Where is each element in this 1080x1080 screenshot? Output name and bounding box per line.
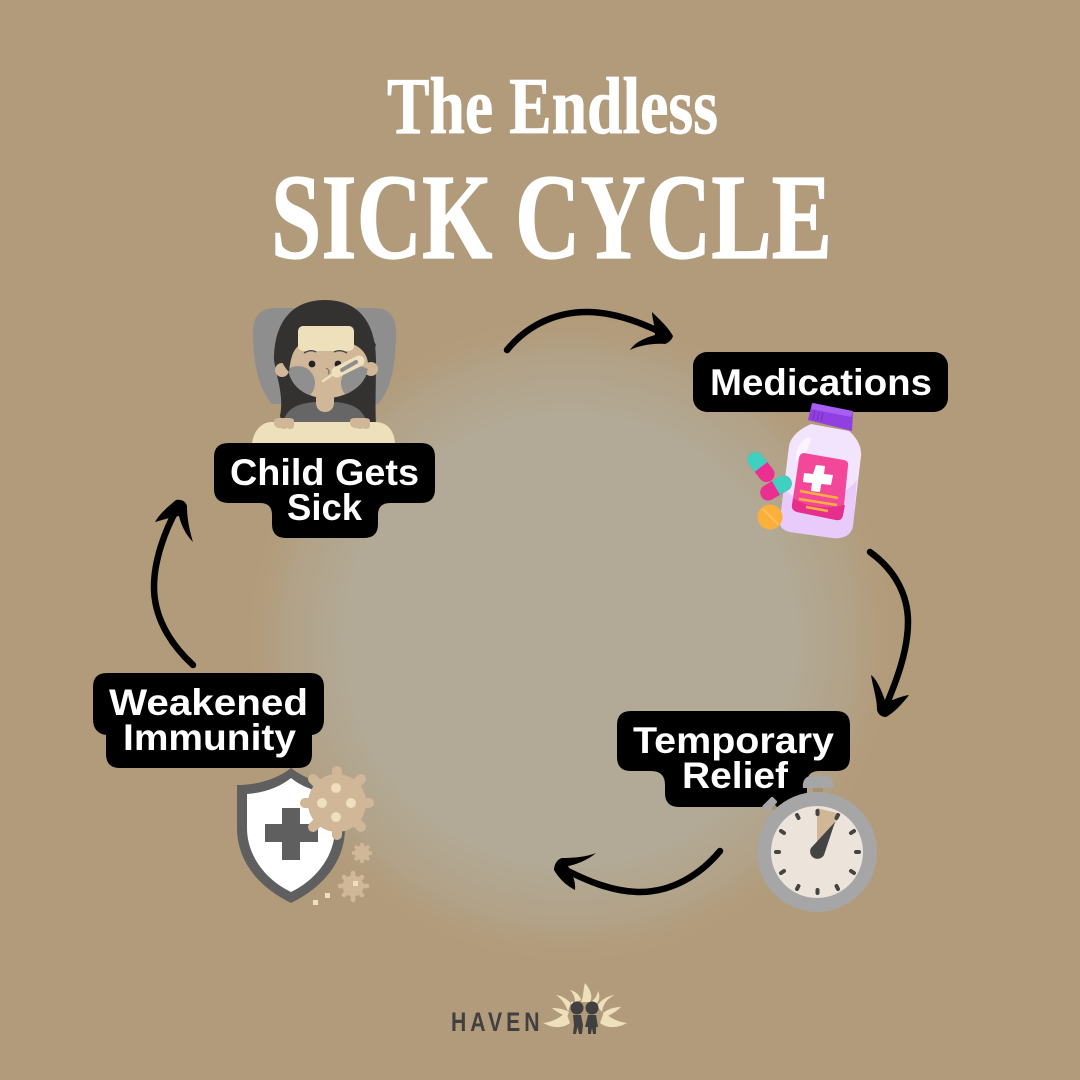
shirt <box>283 402 367 424</box>
label text line 1: Temporary <box>633 720 834 761</box>
background glow <box>240 310 900 970</box>
dots <box>313 893 330 905</box>
cap ridges <box>813 411 823 421</box>
ticks <box>776 811 859 893</box>
arrow: medications to relief <box>870 552 909 717</box>
crown stem <box>813 786 823 796</box>
pill teal and pink 1 <box>744 449 778 485</box>
hands <box>274 418 370 429</box>
outer case <box>757 792 877 912</box>
pill teal and pink 2 <box>757 473 795 503</box>
pillow <box>253 308 396 404</box>
fringe left <box>278 333 303 372</box>
shield cross <box>265 808 318 860</box>
cap <box>808 403 853 431</box>
crown button <box>803 776 833 788</box>
cap top highlight <box>811 403 853 417</box>
cross <box>803 465 833 492</box>
label text line 1: Child Gets <box>230 452 419 493</box>
virus small <box>352 843 372 863</box>
label background <box>617 711 850 807</box>
label background <box>693 352 948 412</box>
thermometer <box>323 361 359 381</box>
label background <box>214 443 435 538</box>
nose <box>326 368 329 374</box>
clock hand <box>810 822 835 859</box>
ear right <box>364 362 378 376</box>
title line: SICK CYCLE: SICK CYCLE <box>271 150 832 285</box>
title <box>271 63 832 285</box>
logo: Haven <box>451 983 627 1038</box>
icon: medicine bottle and pills <box>744 403 861 538</box>
blanket <box>252 422 395 443</box>
logo wordmark: HAVEN <box>451 1008 544 1038</box>
label pink <box>792 453 848 520</box>
arrow: relief to weakened immunity <box>554 851 720 892</box>
label: Medications <box>693 352 948 412</box>
face <box>288 342 368 398</box>
label text line 2: Relief <box>682 755 789 796</box>
label text line 1: Weakened <box>109 682 308 723</box>
side button stem <box>769 802 778 811</box>
label text line 2: Sick <box>287 487 362 528</box>
logo sun rays <box>543 983 627 1027</box>
fringe right <box>354 330 376 360</box>
label lower shade <box>792 498 845 520</box>
icon: shield and virus <box>237 768 372 905</box>
icon: stopwatch <box>757 776 877 912</box>
icon: sick child in bed <box>252 300 396 443</box>
ear left <box>275 363 289 377</box>
infographic canvas <box>93 76 948 1034</box>
eyebrows <box>304 351 347 353</box>
title line: The Endless: The Endless <box>387 63 718 151</box>
cheeks <box>288 366 368 395</box>
arrow: sick to medications <box>507 312 673 350</box>
virus medium <box>340 873 367 900</box>
tablet <box>758 504 782 530</box>
neck <box>316 390 334 412</box>
bottle lower shade <box>780 480 857 538</box>
clock face <box>771 806 863 898</box>
virus large <box>305 771 369 835</box>
elapsed wedge <box>817 808 841 852</box>
shield inner <box>247 778 335 892</box>
logo children silhouettes <box>570 1002 598 1034</box>
tablet score line <box>763 509 778 524</box>
bottle highlight <box>795 438 811 462</box>
compress on forehead <box>298 326 354 351</box>
label text: Medications <box>710 362 932 403</box>
bottle body <box>780 424 861 538</box>
arrow: weakened immunity to sick <box>154 500 193 665</box>
side button <box>762 796 778 812</box>
label: Child Gets Sick <box>214 443 435 538</box>
hair <box>274 300 376 425</box>
label text line 2: Immunity <box>123 717 296 758</box>
label background <box>93 673 324 768</box>
label: Temporary Relief <box>617 711 850 807</box>
shield outer <box>237 768 345 903</box>
label lines <box>799 491 838 511</box>
eyes <box>309 361 341 367</box>
label: Weakened Immunity <box>93 673 324 768</box>
